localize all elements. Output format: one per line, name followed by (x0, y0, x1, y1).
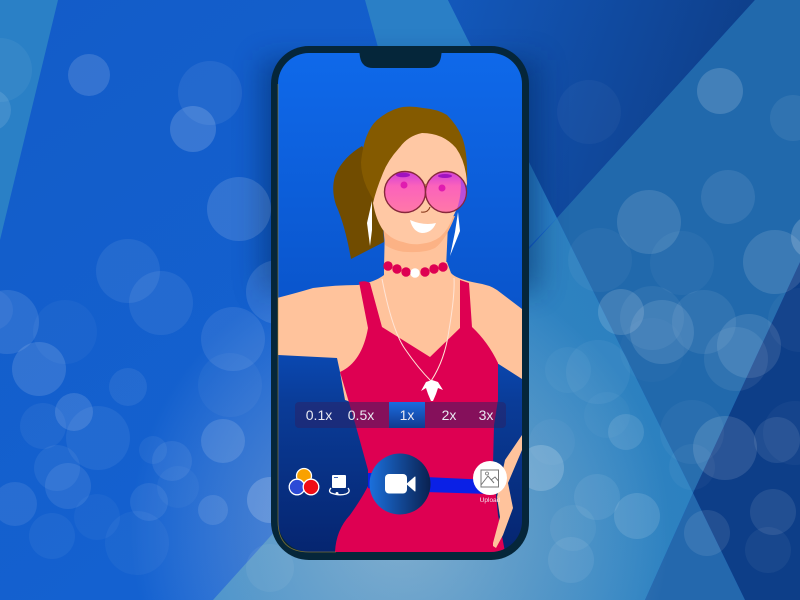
zoom selector (295, 402, 506, 428)
zoom selector: 2x (442, 407, 456, 423)
belt (368, 473, 490, 494)
zoom selector: 1x (400, 407, 414, 423)
hair (361, 107, 467, 202)
zoom selector: 0.5x (348, 407, 374, 423)
face (373, 133, 467, 244)
zoom selector: 0.1x (306, 407, 332, 423)
dress (335, 280, 505, 552)
upload button (473, 461, 507, 504)
bead necklace (383, 261, 448, 278)
zoom selector: 3x (479, 407, 493, 423)
hand (493, 435, 522, 548)
chin shadow (383, 216, 455, 252)
record button (370, 454, 430, 514)
phone (271, 46, 529, 560)
pendant necklace (382, 278, 454, 401)
ponytail (333, 146, 384, 259)
flip camera icon (330, 475, 349, 495)
upload button: Upload (480, 497, 501, 504)
screen edge highlight (278, 84, 336, 552)
notch (359, 50, 442, 68)
nose (421, 207, 430, 212)
phone screen (277, 53, 522, 552)
right earring (450, 212, 460, 256)
sunglasses (384, 170, 470, 212)
person (277, 107, 522, 552)
smile (410, 220, 436, 233)
phone body (271, 46, 529, 560)
torso and arms (278, 262, 522, 402)
left earring (367, 201, 372, 246)
neck (384, 232, 448, 262)
filter icon (289, 468, 319, 495)
